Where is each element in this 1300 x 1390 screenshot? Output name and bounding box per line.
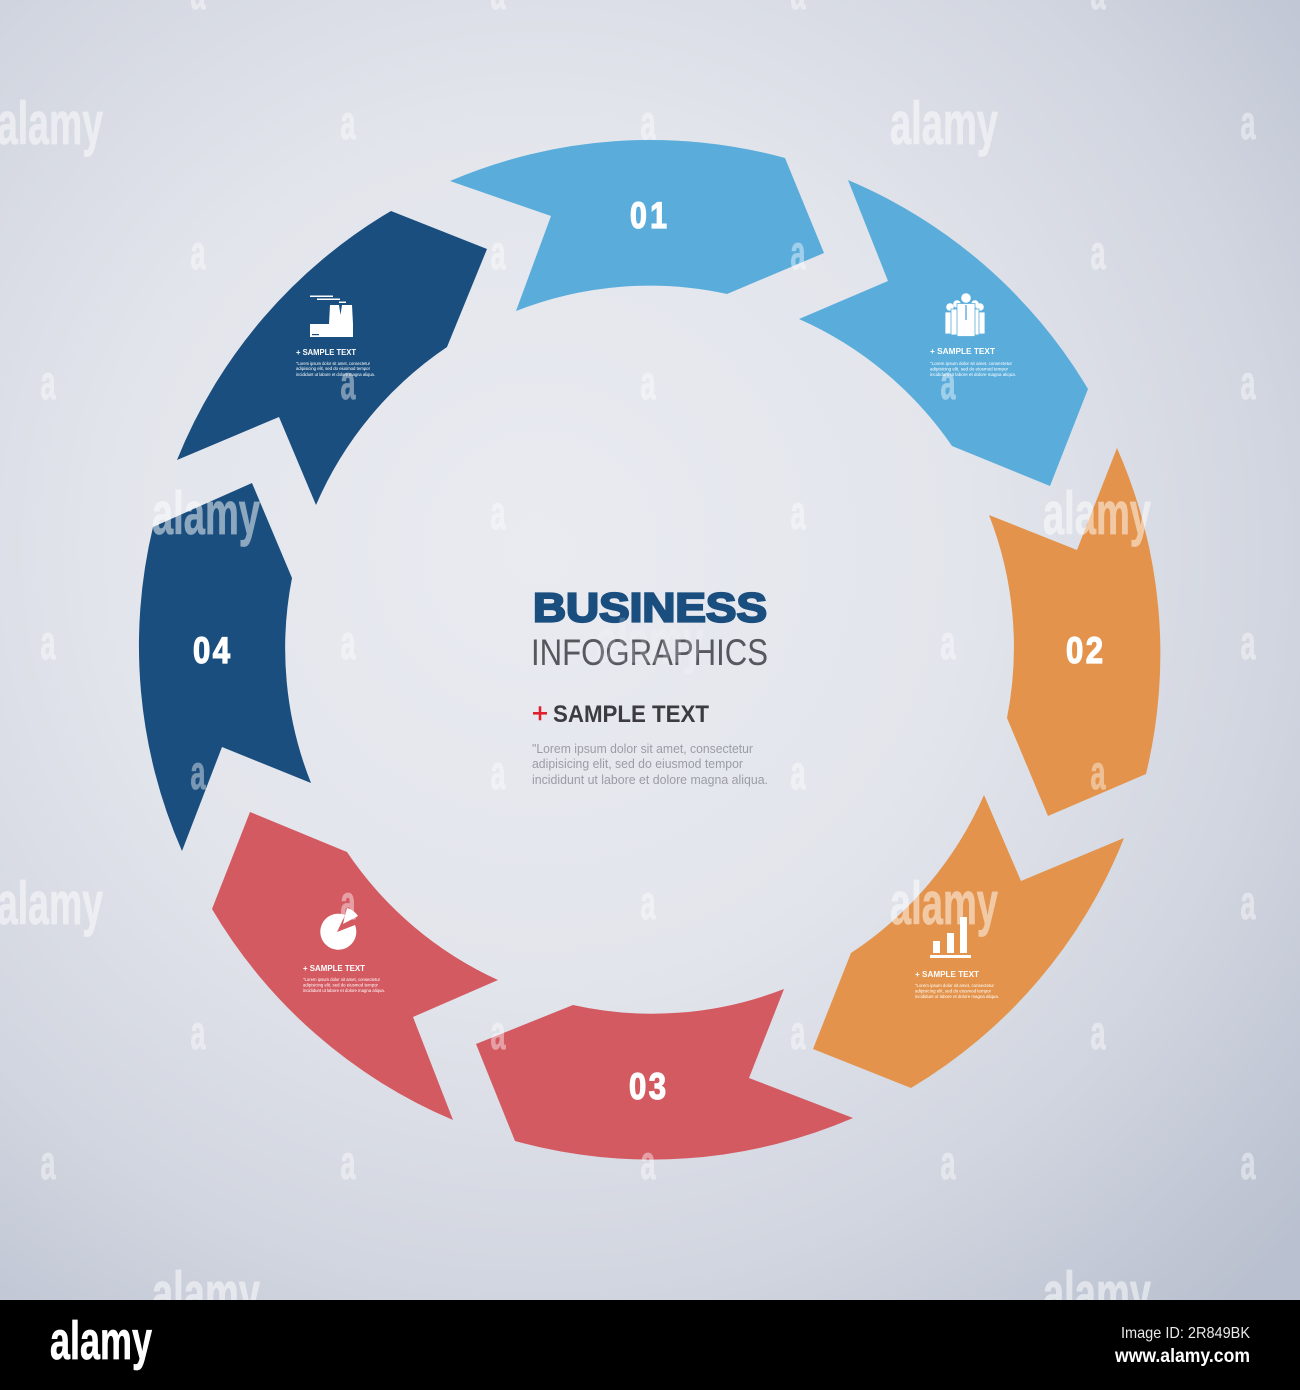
title: BUSINESS xyxy=(533,584,767,630)
watermarks: alamy xyxy=(1043,480,1151,547)
watermarks: a xyxy=(790,487,806,540)
watermarks: alamy xyxy=(890,870,998,937)
text block: upper right sample text: adipisicing elit, sed do eiusmod tempor xyxy=(930,366,1009,372)
watermarks: a xyxy=(40,1137,56,1190)
number 04: 04 xyxy=(193,631,233,672)
center paragraph: adipisicing elit, sed do eiusmod tempor xyxy=(532,757,743,771)
watermarks: a xyxy=(1240,877,1256,930)
watermarks: a xyxy=(1090,747,1106,800)
watermarks: a xyxy=(190,1007,206,1060)
text block: lower left sample text: adipisicing elit, sed do eiusmod tempor xyxy=(303,982,379,988)
text block: upper left sample text: + SAMPLE TEXT xyxy=(296,348,356,357)
text block: lower left sample text: + SAMPLE TEXT xyxy=(303,964,365,973)
text block: upper left sample text: adipisicing elit, sed do eiusmod tempor xyxy=(296,366,371,371)
icon: factory xyxy=(310,296,353,337)
step numbers xyxy=(193,195,1106,1108)
watermarks: alamy xyxy=(1043,1260,1151,1327)
center subheading: SAMPLE TEXT xyxy=(553,701,709,728)
icon: pie chart xyxy=(320,908,358,950)
watermarks: alamy xyxy=(152,1260,260,1327)
watermarks: alamy xyxy=(0,870,103,937)
number 03: 03 xyxy=(629,1067,669,1108)
number 02: 02 xyxy=(1066,631,1106,672)
watermarks: a xyxy=(190,227,206,280)
arrow segment 01 top xyxy=(450,140,824,311)
arrow segment 02 right xyxy=(989,448,1160,816)
watermarks: a xyxy=(640,97,656,150)
watermarks: a xyxy=(790,1007,806,1060)
watermarks: a xyxy=(640,877,656,930)
text block: lower left sample text: incididunt ut labore et dolore magna aliqua. xyxy=(303,988,385,993)
watermarks: a xyxy=(1090,1007,1106,1060)
watermarks: a xyxy=(940,1137,956,1190)
watermarks: a xyxy=(340,617,356,670)
text block: upper left sample text: incididunt ut labore et dolore magna aliqua. xyxy=(296,372,375,377)
arrow segment 03 bottom xyxy=(476,989,853,1160)
watermarks: a xyxy=(790,227,806,280)
text block: upper right sample text xyxy=(930,347,1016,377)
text block: upper right sample text: incididunt ut labore et dolore magna aliqua. xyxy=(930,372,1016,377)
footer bar: Image ID: 2R849BK xyxy=(1121,1325,1250,1342)
text block: upper right sample text: + SAMPLE TEXT xyxy=(930,347,995,356)
watermarks: a xyxy=(490,747,506,800)
text block: lower right sample text: "Lorem ipsum dolor sit amet, consectetur xyxy=(915,983,995,988)
number 01: 01 xyxy=(630,195,670,237)
text block: lower left sample text xyxy=(303,964,385,993)
watermarks: a xyxy=(1240,617,1256,670)
footer bar: alamy xyxy=(50,1311,152,1371)
watermarks: alamy xyxy=(152,480,260,547)
arrow segment lower left xyxy=(212,812,498,1120)
text block: lower left sample text: "Lorem ipsum dolor sit amet, consectetur xyxy=(303,977,381,982)
arrow segment 04 left xyxy=(139,483,311,851)
circular arrow ring xyxy=(139,140,1160,1160)
text block: upper right sample text: "Lorem ipsum dolor sit amet, consectetur xyxy=(930,361,1013,366)
text block: upper left sample text xyxy=(296,348,375,377)
watermarks: alamy xyxy=(0,90,103,157)
center paragraph: incididunt ut labore et dolore magna aliqua. xyxy=(532,773,768,787)
watermarks: a xyxy=(40,617,56,670)
watermarks: a xyxy=(1240,357,1256,410)
watermarks: alamy xyxy=(890,90,998,157)
watermarks: a xyxy=(1090,227,1106,280)
center paragraph: "Lorem ipsum dolor sit amet, consectetur xyxy=(532,742,753,756)
watermarks: a xyxy=(640,1137,656,1190)
watermarks: a xyxy=(790,747,806,800)
watermarks: a xyxy=(340,357,356,410)
watermarks: a xyxy=(190,747,206,800)
watermarks: a xyxy=(1240,1137,1256,1190)
watermarks: a xyxy=(340,1137,356,1190)
center paragraph xyxy=(532,742,768,787)
watermarks: a xyxy=(340,877,356,930)
watermarks: a xyxy=(490,227,506,280)
watermarks: a xyxy=(640,357,656,410)
watermarks: a xyxy=(1240,97,1256,150)
watermarks: a xyxy=(40,357,56,410)
watermarks: a xyxy=(940,357,956,410)
text block: lower right sample text: + SAMPLE TEXT xyxy=(915,970,979,979)
watermarks: a xyxy=(340,97,356,150)
arrow segment upper right xyxy=(799,180,1088,486)
text block: lower right sample text xyxy=(915,970,999,999)
arrow segment upper left xyxy=(177,211,487,505)
text block: lower right sample text: incididunt ut labore et dolore magna aliqua. xyxy=(915,994,999,999)
icon: people group xyxy=(945,293,985,336)
title xyxy=(531,584,768,673)
watermarks: a xyxy=(490,487,506,540)
icon: bar chart xyxy=(930,917,971,958)
footer bar xyxy=(0,1300,1300,1390)
watermarks: alamy xyxy=(596,608,704,675)
text block: upper left sample text: "Lorem ipsum dolor sit amet, consectetur xyxy=(296,361,371,366)
text block: lower right sample text: adipisicing elit, sed do eiusmod tempor xyxy=(915,988,992,994)
arrow segment lower right xyxy=(813,795,1124,1088)
watermarks: a xyxy=(940,617,956,670)
watermarks: a xyxy=(490,1007,506,1060)
title: INFOGRAPHICS xyxy=(531,632,768,673)
footer bar: www.alamy.com xyxy=(1114,1346,1250,1367)
